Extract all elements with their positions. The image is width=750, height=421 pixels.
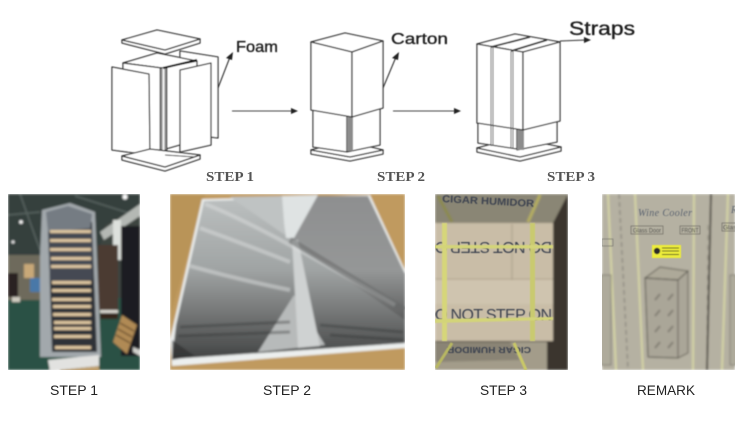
label: Carton: Carton	[391, 31, 448, 48]
carton text: DO NOT STEP ON	[424, 307, 552, 324]
carton box	[477, 34, 560, 130]
carton text: CIGAR HUMIDOR	[442, 194, 535, 210]
photo: remark carton label	[598, 194, 740, 370]
wine cooler carton text: R	[730, 205, 737, 216]
caption: photo step 2: STEP 2	[263, 383, 311, 398]
carton text: DO NOT STEP ON	[424, 238, 552, 255]
photo: step 1 wrapped cooler	[8, 194, 140, 372]
straps	[491, 37, 547, 148]
foam back right panel	[180, 51, 218, 138]
carton box	[311, 33, 383, 117]
photo: step 2 film-wrapped door	[170, 194, 405, 370]
yellow warning sticker	[652, 245, 681, 258]
exposed lower foam	[313, 108, 380, 152]
arrow: straps pointer	[560, 37, 591, 43]
caption: remark: REMARK	[637, 383, 695, 398]
arrow: foam pointer	[218, 52, 233, 88]
foam left panel	[112, 67, 150, 155]
caption: photo step 1: STEP 1	[50, 383, 98, 398]
pallet base	[477, 138, 561, 161]
carton text	[424, 194, 552, 354]
yellow straps	[435, 223, 553, 370]
arrow: step 1 to step 2	[232, 108, 298, 114]
wine cooler carton text: Glass	[723, 224, 740, 232]
wine cooler carton text: Glass Door	[633, 228, 662, 234]
wine cooler carton text: FRONT	[682, 228, 699, 234]
pallet base	[311, 141, 383, 161]
label: Straps: Straps	[569, 19, 635, 40]
caption: photo step 3: STEP 3	[480, 383, 527, 398]
heading: diagram step 3: STEP 3	[547, 169, 595, 184]
wine cooler carton text	[602, 205, 740, 246]
exposed lower foam	[478, 120, 557, 150]
wine cooler carton text: Wine Cooler	[638, 208, 692, 219]
pallet base	[122, 149, 200, 171]
foam top panel	[122, 30, 200, 54]
label: Foam: Foam	[236, 39, 278, 56]
heading: diagram step 1: STEP 1	[206, 169, 254, 184]
diagram: step 3 straps	[477, 19, 635, 161]
foam front right panel	[180, 63, 211, 152]
heading: diagram step 2: STEP 2	[377, 169, 425, 184]
arrow: step 2 to step 3	[393, 108, 461, 114]
photo: step 3 strapped cartons	[424, 194, 568, 370]
arrow: carton pointer	[383, 52, 399, 88]
diagram: step 2 carton	[311, 31, 461, 161]
carton text: CIGAR HUMIDOR	[447, 345, 531, 354]
diagram: step 1 foam assembly	[112, 30, 298, 171]
cooler core	[123, 53, 197, 150]
